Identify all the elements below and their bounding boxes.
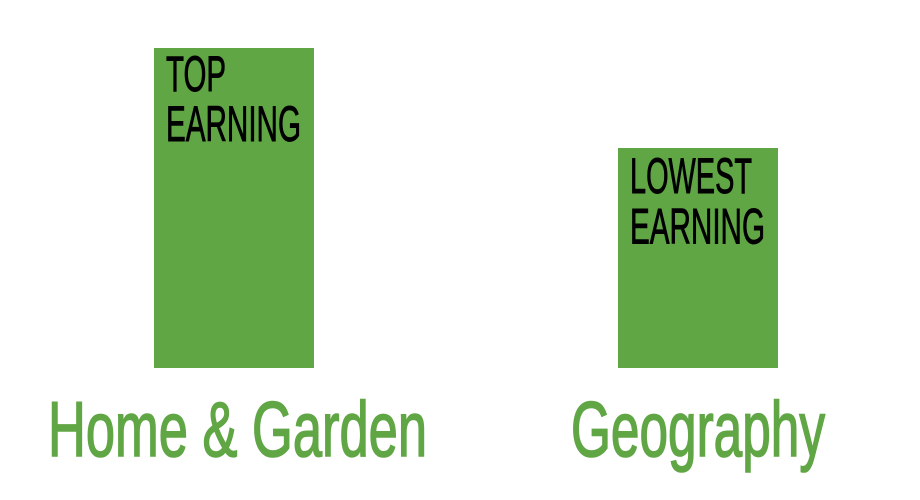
bar label: lowest earning: LOWEST xyxy=(630,148,752,204)
category label: Home & Garden: Home & Garden xyxy=(48,385,427,473)
bar: lowest earning xyxy=(618,148,778,368)
bar group: Geography xyxy=(571,148,825,473)
bar: top earning xyxy=(154,48,314,368)
bar label: top earning xyxy=(166,46,301,152)
bar label: lowest earning: EARNING xyxy=(630,198,765,254)
bar label: top earning: TOP xyxy=(166,46,226,102)
bar label: lowest earning xyxy=(630,148,765,254)
bar label: top earning: EARNING xyxy=(166,96,301,152)
bar group: Home & Garden xyxy=(48,46,427,473)
